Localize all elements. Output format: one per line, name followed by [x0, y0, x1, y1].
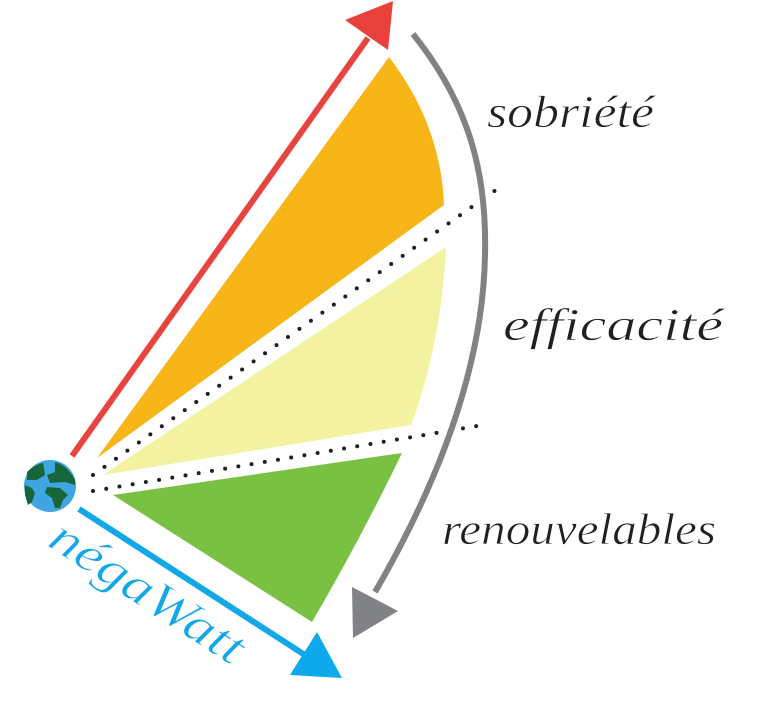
arrow: blue	[79, 509, 342, 678]
label: négaWatt: négaWatt	[40, 507, 258, 676]
arrow: red	[72, 1, 393, 456]
dotted divider: lower	[93, 426, 477, 491]
wedge: efficacité (pale yellow)	[103, 247, 446, 475]
label: sobriété: sobriété	[487, 86, 657, 137]
wedge: renouvelables (green)	[113, 453, 402, 622]
label: efficacité: efficacité	[503, 299, 726, 350]
arrow: gray curved	[352, 34, 485, 638]
label: renouvelables: renouvelables	[442, 505, 716, 554]
icon: globe	[24, 460, 76, 512]
dotted divider: upper	[93, 187, 500, 475]
wedge: sobriété (orange)	[97, 57, 444, 458]
